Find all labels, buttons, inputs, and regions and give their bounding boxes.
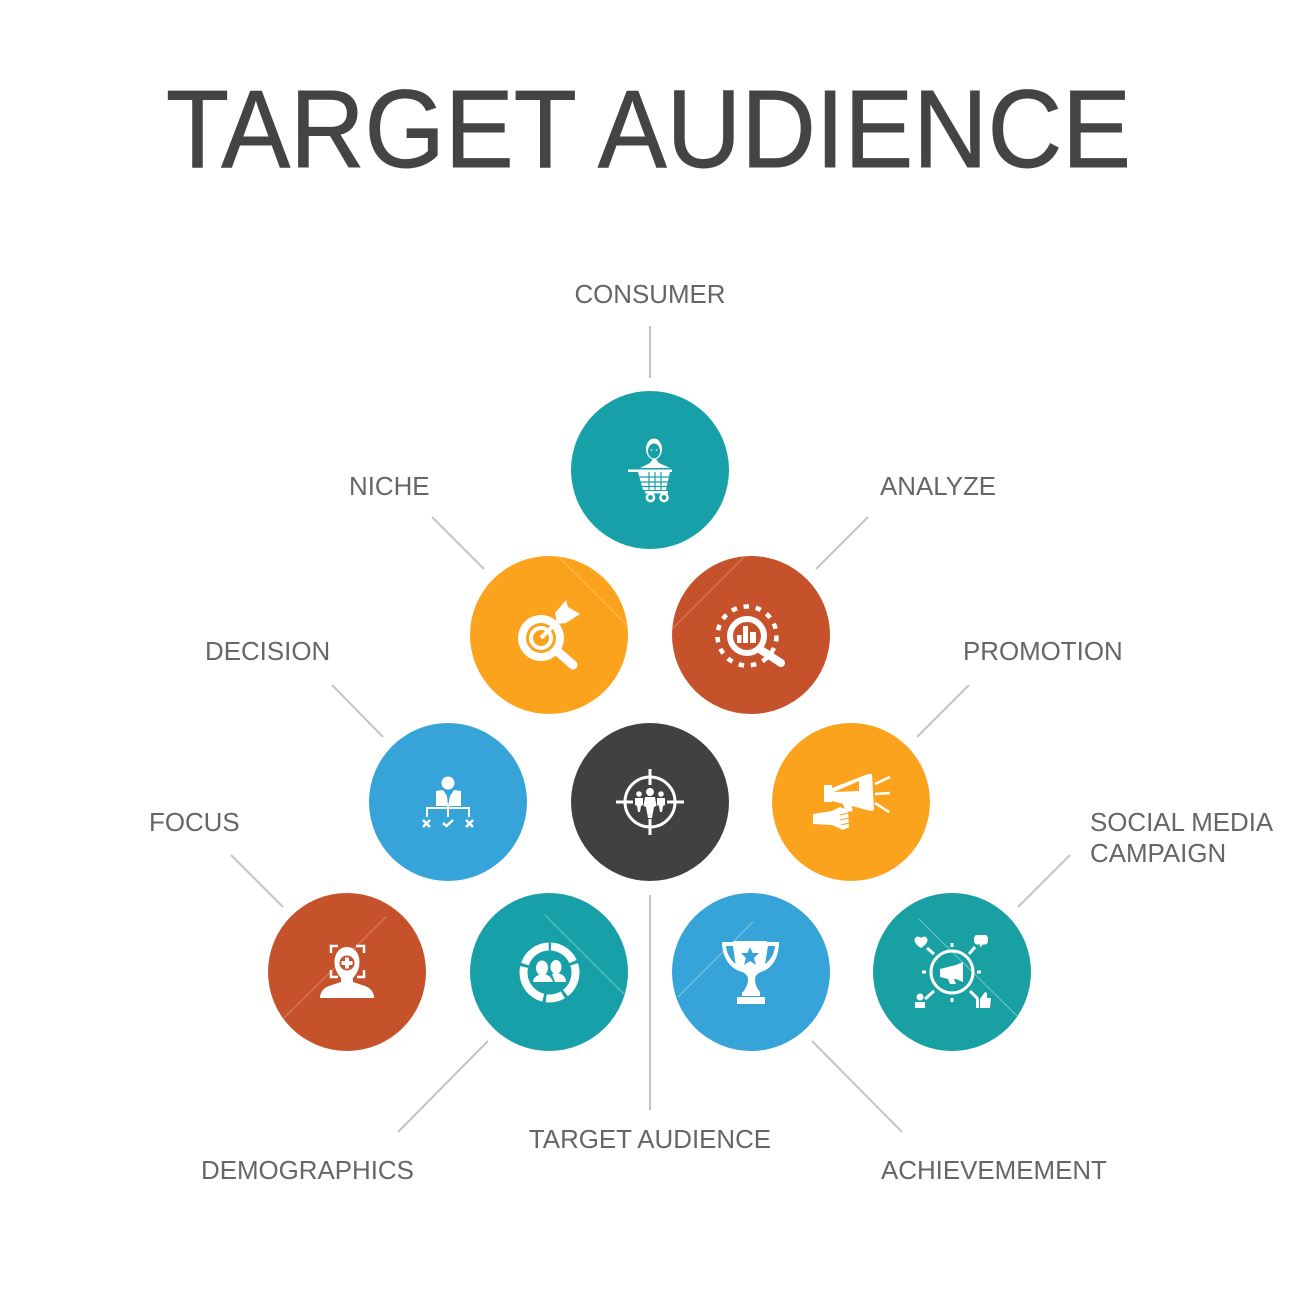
connector: target audience bbox=[649, 895, 651, 1110]
icon: trophy with star bbox=[722, 941, 779, 1004]
connector: analyze bbox=[816, 517, 868, 569]
connector: consumer bbox=[649, 326, 651, 378]
icon: hand with megaphone bbox=[813, 774, 890, 830]
icon: head with focus frame bbox=[320, 946, 374, 998]
label: demographics: DEMOGRAPHICS bbox=[201, 1157, 414, 1185]
title: TARGET AUDIENCE bbox=[166, 68, 1131, 191]
icon: megaphone with social links bbox=[914, 935, 991, 1008]
circle: target audience center bbox=[571, 723, 729, 881]
circle: demographics bbox=[470, 893, 628, 1051]
connector: achievement bbox=[812, 1041, 902, 1132]
circle: social media campaign bbox=[873, 893, 1031, 1051]
circle: analyze bbox=[672, 556, 830, 714]
icon: crosshair with people bbox=[616, 769, 684, 835]
circle: niche bbox=[470, 556, 628, 714]
label: consumer: CONSUMER bbox=[574, 281, 726, 309]
connector: demographics bbox=[398, 1041, 488, 1132]
circle: achievement bbox=[672, 893, 830, 1051]
connector: niche bbox=[432, 517, 484, 569]
label: decision: DECISION bbox=[205, 638, 330, 666]
circle: promotion bbox=[772, 723, 930, 881]
label: social media campaign: SOCIAL MEDIA bbox=[1090, 809, 1273, 837]
label: achievement: ACHIEVEMEMENT bbox=[881, 1157, 1107, 1185]
circle: focus bbox=[268, 893, 426, 1051]
connector: decision bbox=[332, 685, 383, 737]
icon: magnifier with bar chart bbox=[718, 606, 781, 666]
circle: consumer bbox=[571, 391, 729, 549]
connector: focus bbox=[231, 855, 283, 907]
label: target audience: TARGET AUDIENCE bbox=[529, 1126, 771, 1154]
icon: decision tree bbox=[423, 776, 473, 827]
icon: people in ring bbox=[524, 946, 576, 998]
label: focus: FOCUS bbox=[149, 809, 240, 837]
label: promotion: PROMOTION bbox=[963, 638, 1123, 666]
connector: promotion bbox=[917, 685, 969, 737]
label: social media campaign: CAMPAIGN bbox=[1090, 840, 1226, 868]
label: niche: NICHE bbox=[349, 473, 430, 501]
icon: person in shopping cart bbox=[628, 438, 672, 501]
connector: social media campaign bbox=[1018, 855, 1070, 907]
label: analyze: ANALYZE bbox=[880, 473, 996, 501]
icon: target and arrow bbox=[518, 600, 580, 665]
circle: decision bbox=[369, 723, 527, 881]
